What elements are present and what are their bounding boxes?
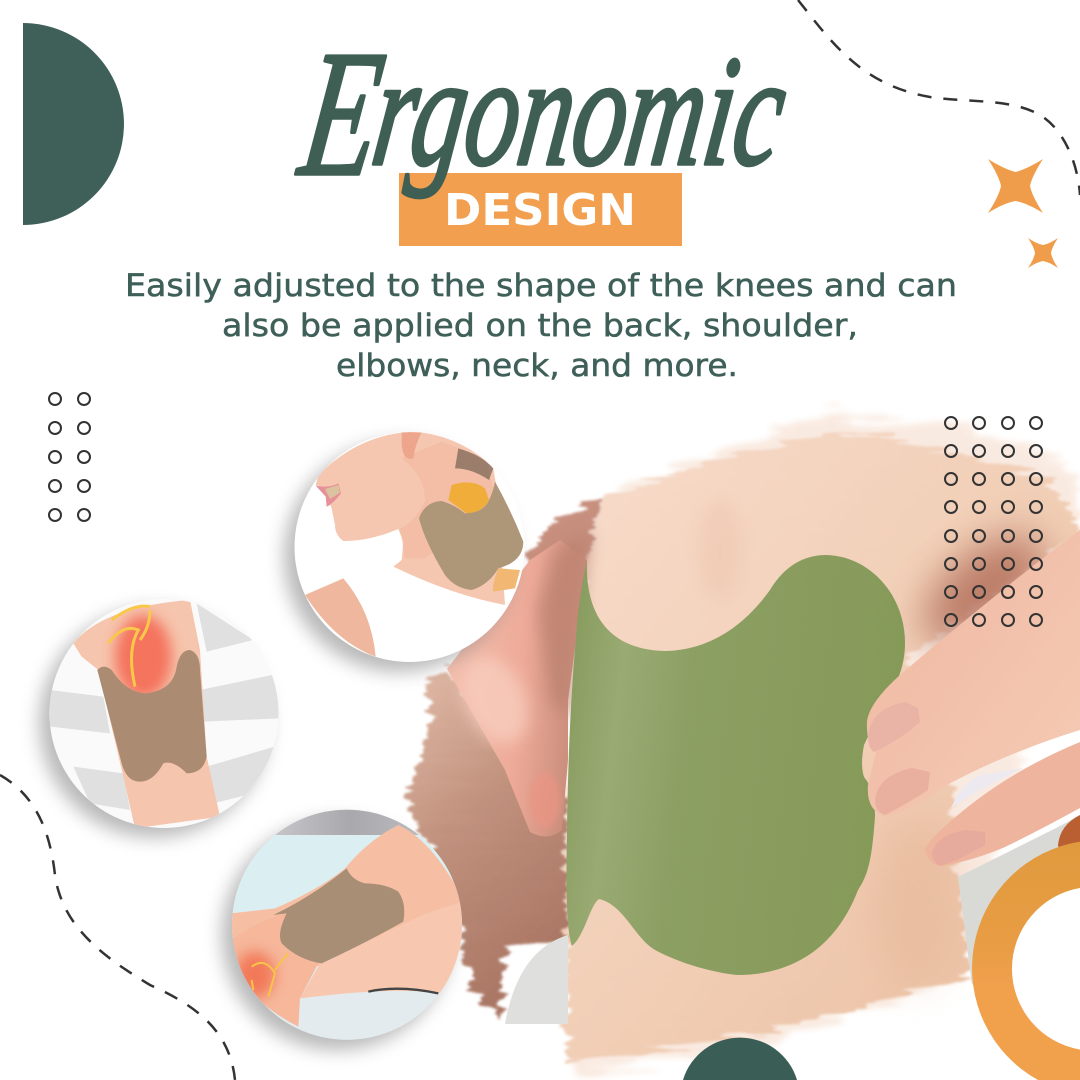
decoration: dashed curve top right bbox=[798, 0, 1080, 195]
decoration: dashed curve bottom left bbox=[0, 775, 235, 1080]
title: rgonomic bbox=[364, 25, 796, 199]
leg bbox=[73, 600, 220, 828]
title: E bbox=[289, 14, 394, 213]
face and neck bbox=[316, 432, 505, 605]
circle photo: knee patch bbox=[40, 599, 280, 838]
dot grid right bbox=[945, 417, 1042, 626]
brown patch bbox=[97, 650, 207, 782]
brown shadow behind the arm bbox=[405, 669, 567, 1020]
background band bbox=[276, 810, 419, 835]
shoulder bbox=[305, 578, 376, 657]
circle photo: neck patch bbox=[284, 432, 524, 672]
brown patch bbox=[419, 482, 523, 590]
decoration: orange ring bbox=[972, 842, 1080, 1080]
foot bbox=[232, 913, 318, 1027]
soft crease on upper arm bbox=[698, 500, 742, 600]
decoration: bottom teal semicircle bbox=[683, 1038, 797, 1080]
icon: large orange star bbox=[988, 159, 1043, 213]
icon: small orange star bbox=[1028, 238, 1058, 268]
supporting hand at left bbox=[447, 497, 603, 837]
neck heat glow bbox=[448, 482, 489, 513]
skin backdrop bbox=[565, 434, 1080, 1062]
banner: orange design label: DESIGN bbox=[444, 185, 636, 236]
dark shadow under right hand bbox=[905, 515, 1065, 665]
lower arm shading bbox=[873, 815, 957, 985]
right hand fingers bbox=[867, 530, 1080, 866]
bed sheet bbox=[267, 991, 438, 1040]
pale background gap between fingers bbox=[951, 768, 1023, 808]
banner: orange design label bbox=[399, 173, 682, 246]
hair bbox=[455, 448, 493, 480]
circle photo: ankle patch bbox=[222, 807, 475, 1050]
grey background wedge bottom left bbox=[505, 935, 568, 1024]
fingernails bbox=[868, 702, 920, 752]
main photo: arm with green patch bbox=[405, 412, 1080, 1075]
heat glow bbox=[235, 952, 275, 998]
grey background wedge bottom right bbox=[958, 815, 1080, 985]
dot grid left bbox=[49, 393, 90, 521]
heat glow bbox=[115, 615, 172, 698]
description text: elbows, neck, and more. bbox=[336, 348, 738, 384]
decoration: half circle top left bbox=[23, 23, 124, 225]
upper leg bbox=[232, 825, 462, 967]
green patch bbox=[567, 555, 905, 975]
shadow line under leg bbox=[368, 989, 438, 993]
striped shirt bbox=[50, 603, 280, 810]
brush feather layer bbox=[555, 412, 1080, 1075]
description text: also be applied on the back, shoulder, bbox=[222, 308, 858, 344]
description text bbox=[125, 268, 957, 384]
lower heat glow bbox=[493, 568, 520, 592]
brown patch bbox=[273, 868, 404, 963]
description text: Easily adjusted to the shape of the knees and can bbox=[125, 268, 957, 304]
lower leg bbox=[300, 902, 465, 998]
